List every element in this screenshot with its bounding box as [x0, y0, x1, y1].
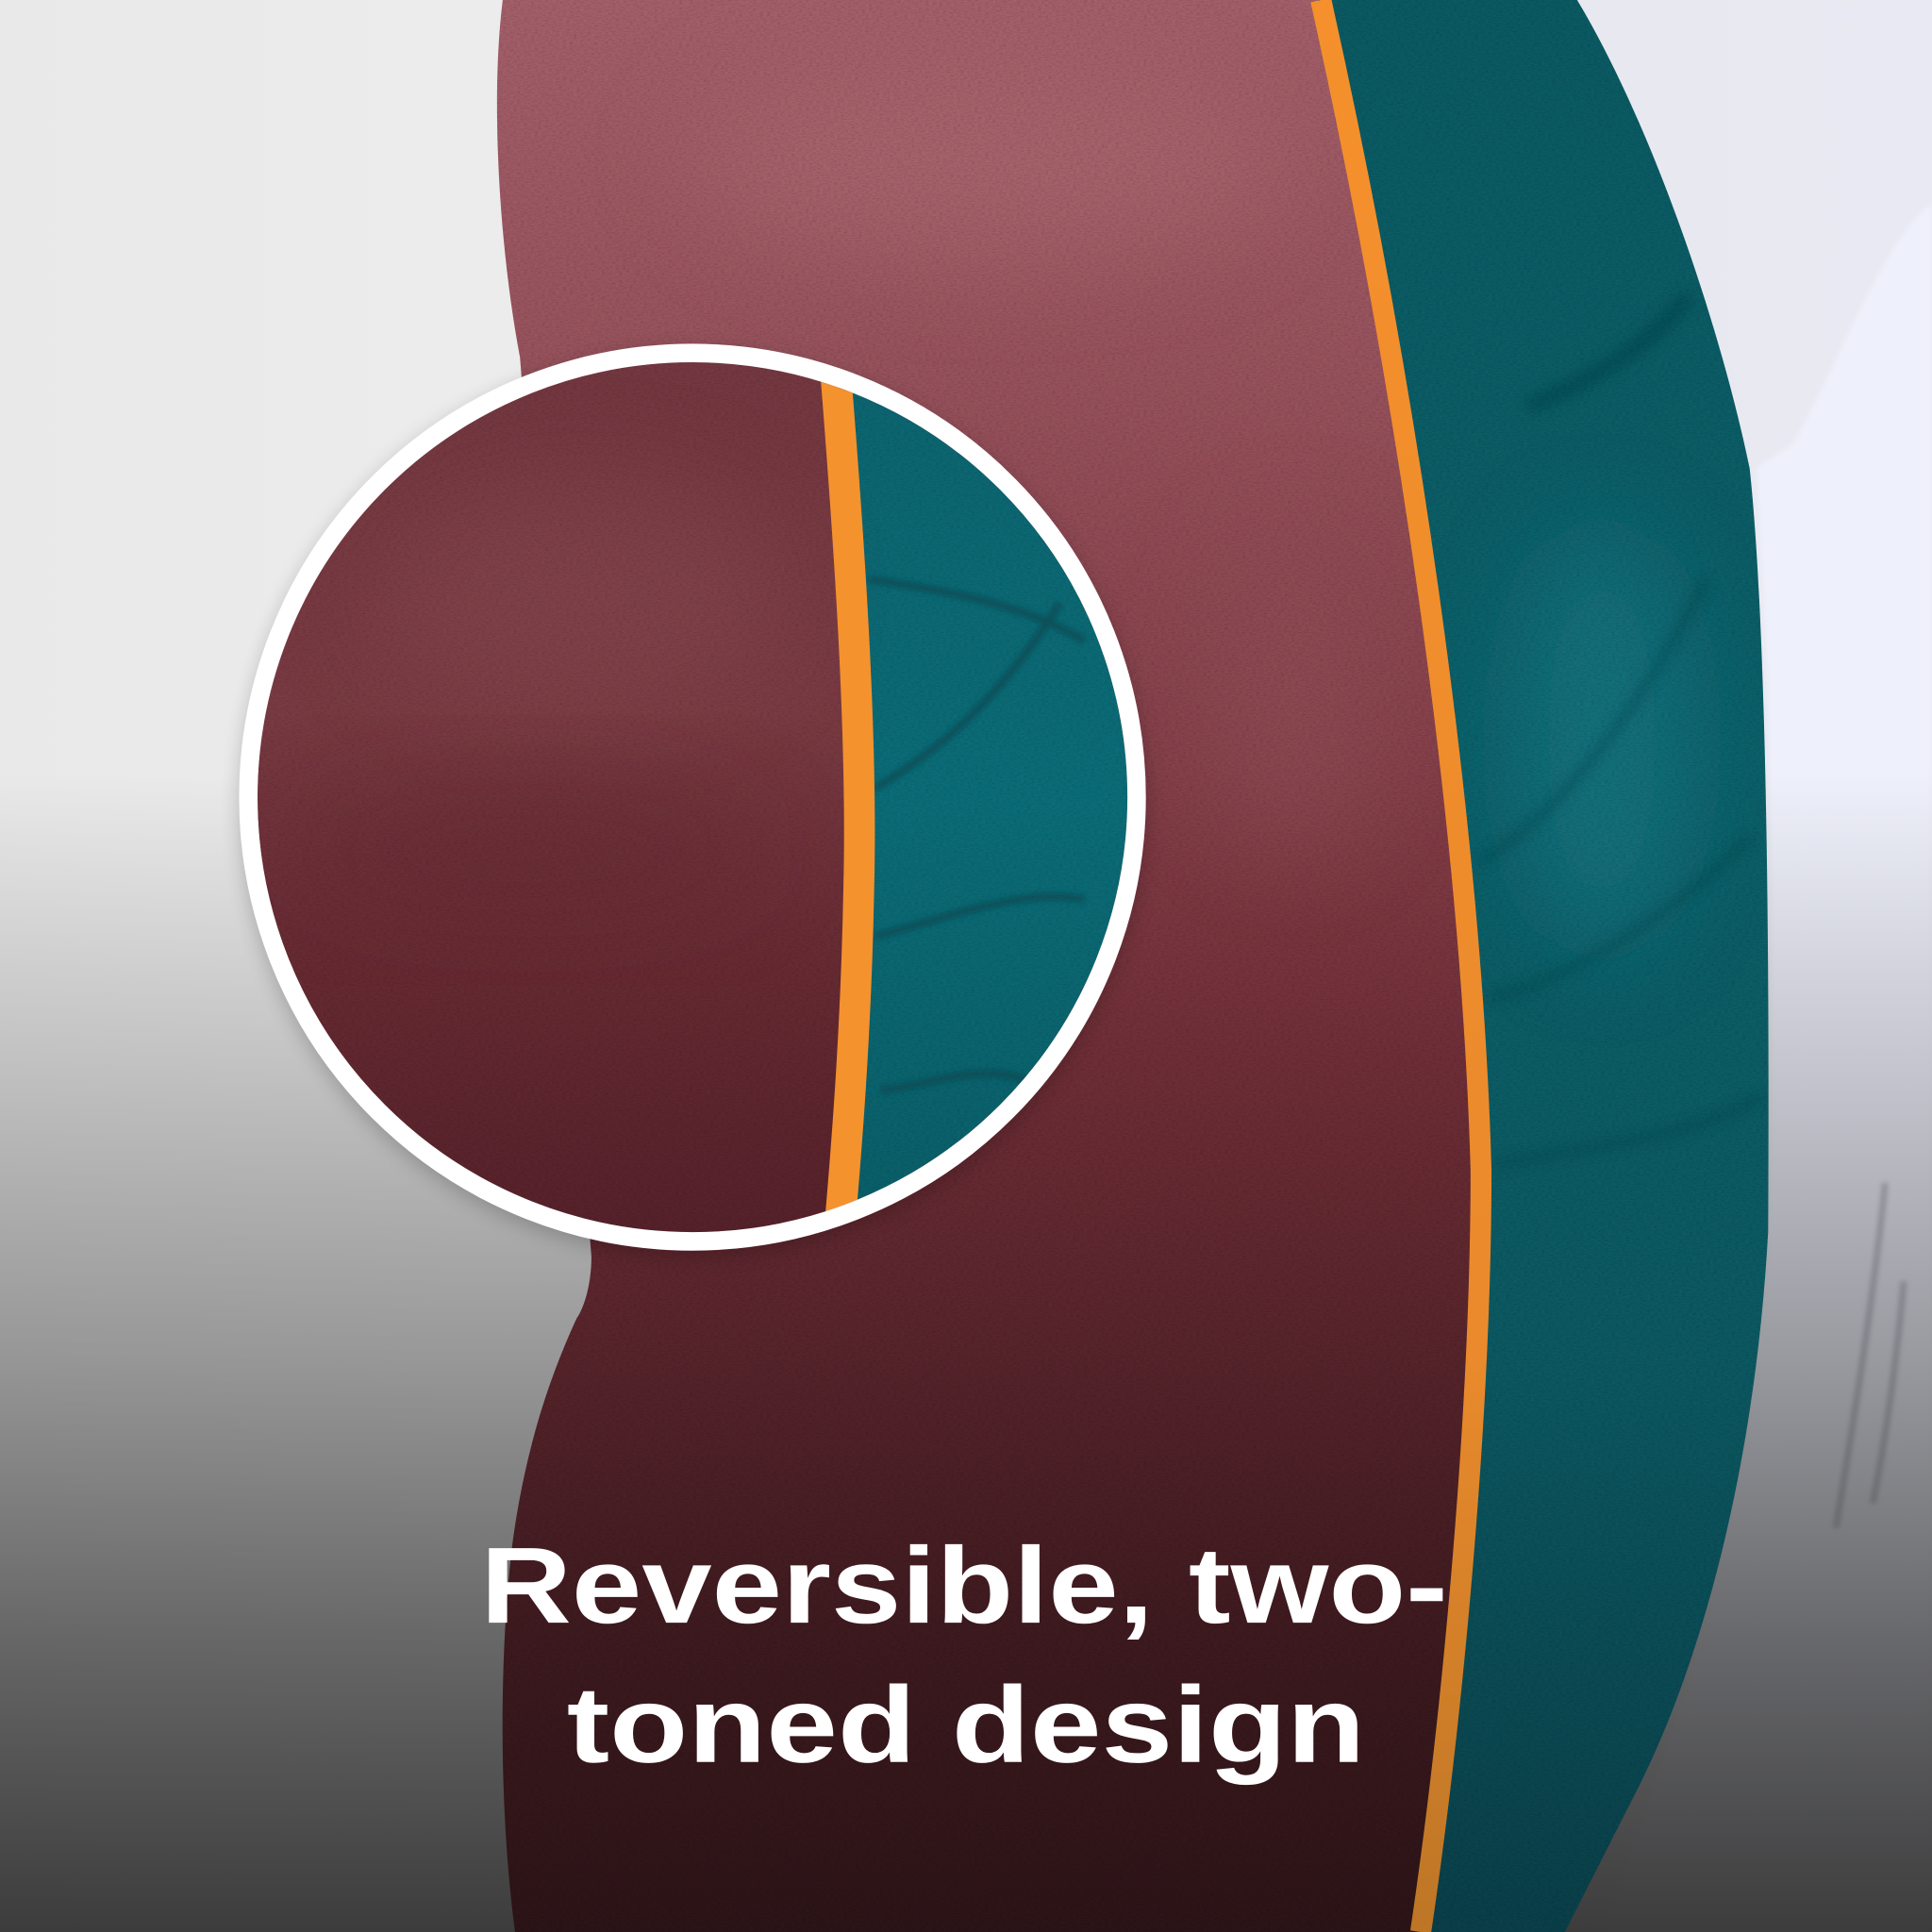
headline: toned design [567, 1665, 1365, 1786]
fabric shading [370, 480, 789, 702]
orange piping detail [836, 370, 859, 1220]
headline: Reversible, two- [480, 1525, 1448, 1646]
maroon front side [497, 0, 1489, 1932]
teal reverse side [1319, 0, 1769, 1932]
circle contents [258, 362, 1127, 1232]
fabric nap texture [497, 0, 1769, 1932]
white ring [248, 353, 1137, 1241]
headline [480, 1525, 1448, 1786]
teal fabric creases [1502, 296, 1696, 996]
orange piping [1321, 0, 1481, 1932]
teal creases [869, 579, 1084, 1091]
zoom circle callout [239, 350, 1232, 1257]
maroon fabric highlights [690, 61, 1380, 850]
fabric nap texture [246, 358, 1146, 1244]
pillow [497, 0, 1769, 1932]
